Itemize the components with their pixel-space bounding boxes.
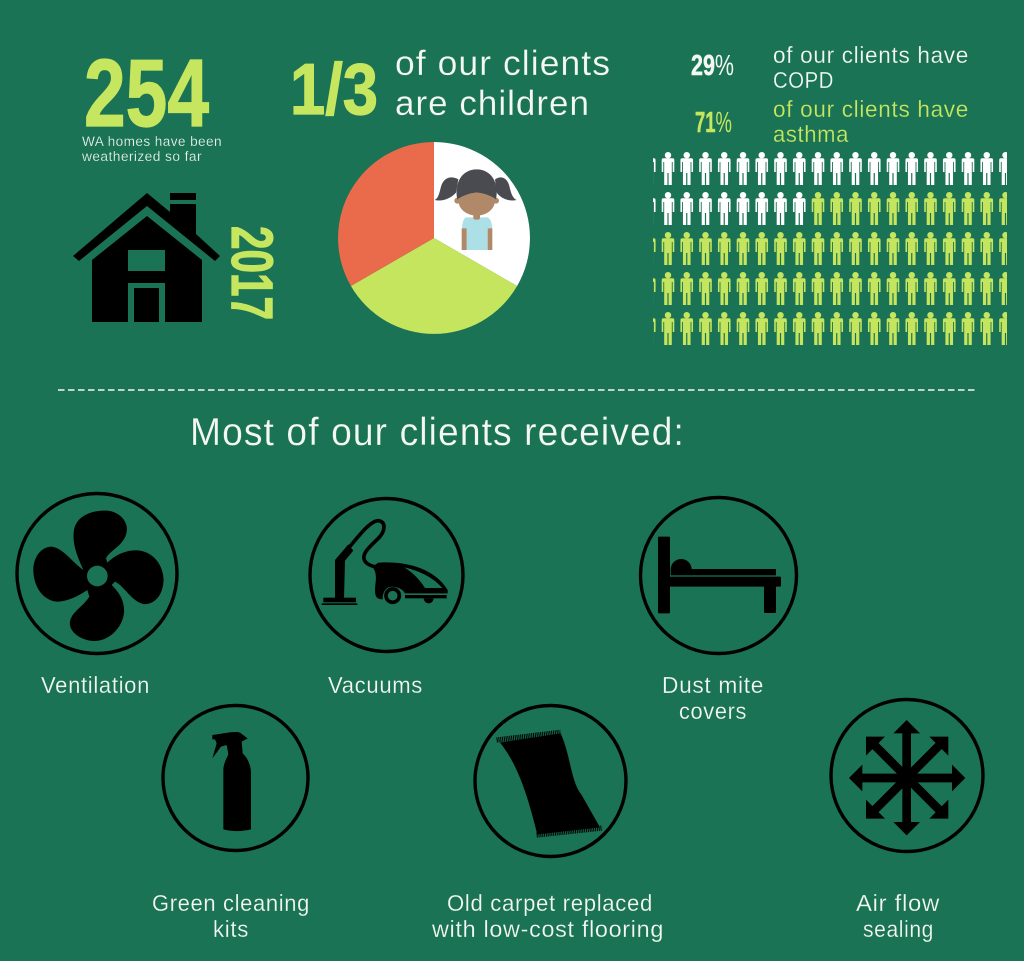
label: Green cleaning: Green cleaning [152,890,310,916]
label: Ventilation: Ventilation [41,672,150,698]
text: of our clients have: of our clients have [773,42,969,68]
icon: house [73,193,220,322]
icon ring: air flow [831,700,983,852]
label: Dust mite: Dust mite [662,672,764,698]
stat: 1/3: 1/3 [290,50,378,130]
panel: homes weatherized [73,40,284,322]
heading line: of our clients: of our clients [395,43,611,83]
pie chart [338,142,530,334]
label: Old carpet replaced: Old carpet replaced [447,890,653,916]
label: covers: covers [679,698,747,724]
icon: carpet [497,732,602,835]
icon ring: vacuum [310,498,463,652]
icon: bed [658,537,781,613]
pictogram grid of people [643,152,1012,345]
item: green cleaning kits [152,706,310,942]
icon: spray bottle [212,732,251,831]
text: of our clients have, green: of our clients have [773,96,969,122]
label: Vacuums: Vacuums [328,672,423,698]
icon ring: bed [640,498,796,654]
label: with low-cost flooring: with low-cost flooring [431,916,664,942]
label: kits: kits [213,916,249,942]
panel: children share [290,43,611,334]
text: COPD: COPD [773,67,834,93]
item: dust mite covers [640,498,796,724]
text: asthma: asthma [773,121,849,147]
panel: COPD and asthma [643,42,1012,345]
stat: 71%: 71% [695,107,732,139]
item: air flow sealing [831,700,983,942]
item: ventilation [17,494,177,698]
icon ring: carpet [475,706,626,856]
stat: 29%: 29% [691,50,734,82]
icon: fan [33,511,164,641]
year: 2017: 2017 [219,226,284,320]
section heading: Most of our clients received: [190,411,685,454]
label: sealing: sealing [863,916,934,942]
item: vacuums [310,498,463,698]
item: carpet replaced [431,706,664,942]
icon ring: spray bottle [163,706,308,850]
label: Air flow: Air flow [856,890,940,916]
icon: vacuum [322,521,448,605]
heading line: are children: are children [395,83,590,123]
stat: 254: 254 [84,40,209,147]
icon ring: fan [17,494,177,654]
icon: arrows in eight directions [849,720,965,835]
icon: girl [435,169,517,250]
caption line two: weatherized so far [81,149,202,164]
caption: homes weatherized: WA homes have been [82,134,222,149]
